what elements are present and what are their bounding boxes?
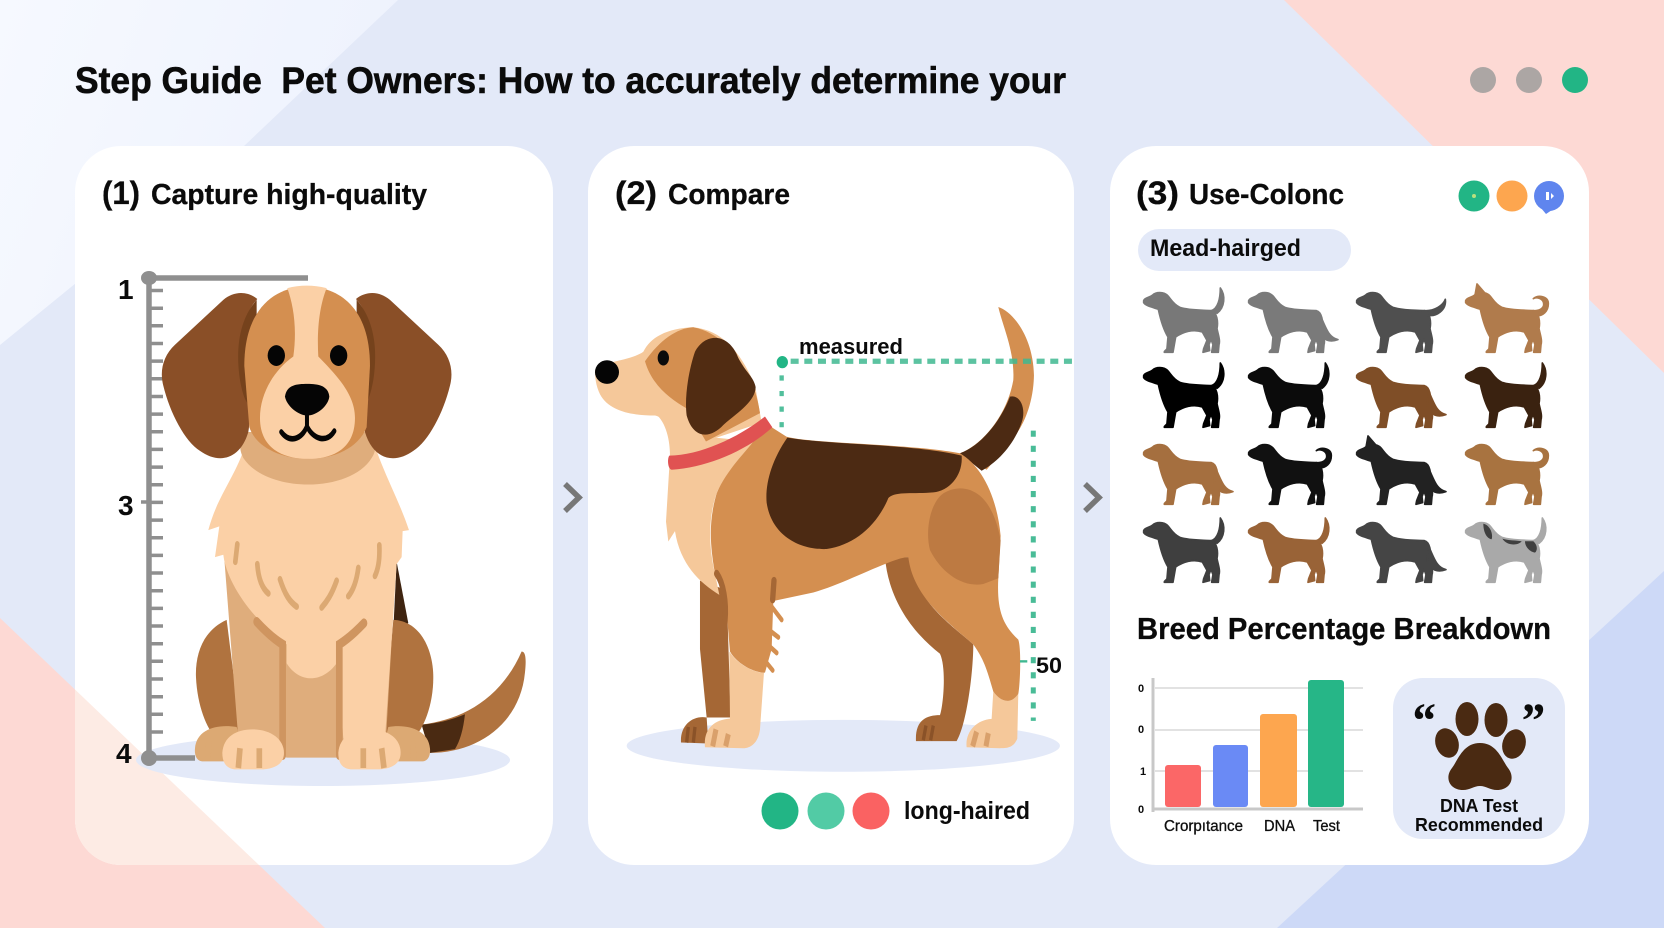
panel 2 heading: Compare [668, 179, 790, 211]
bar chart: 0 [1138, 724, 1144, 736]
bar chart: DNA [1264, 818, 1296, 835]
quote marks: “ [1410, 692, 1435, 748]
panel 3 colour dots [1458, 180, 1564, 214]
header status dots [1470, 67, 1588, 93]
panel 2 heading [615, 175, 790, 211]
height ruler: 1 [118, 274, 134, 305]
panel 3 heading [1136, 175, 1344, 211]
panel 2 heading: (2) [615, 175, 657, 211]
subheading: breed percentage breakdown: Breed Percentage Breakdown [1137, 611, 1551, 646]
height ruler: 4 [116, 738, 132, 769]
icon: standing dog [595, 307, 1060, 772]
legend: long-haired [762, 792, 1030, 830]
bar chart: 1 [1140, 766, 1146, 778]
quote marks: ” [1519, 692, 1544, 748]
icon: sitting dog [162, 286, 526, 769]
bar chart: 0 [1138, 804, 1144, 816]
height ruler [116, 271, 308, 769]
panel 1 heading: Capture high-quality [151, 179, 427, 211]
callout text: DNA Test [1440, 795, 1518, 816]
legend: long-haired: long-haired [904, 797, 1030, 825]
icon: paw print [1431, 702, 1530, 790]
callout text: Recommended [1415, 814, 1543, 835]
panel 1 heading: (1) [102, 175, 140, 211]
label: 50: 50 [1036, 653, 1062, 678]
title: Step Guide Pet Owners: How to accurately determine your [75, 60, 1066, 101]
panel 3 heading: Use-Colonc [1189, 179, 1344, 211]
dog silhouette grid [1144, 284, 1548, 582]
panel: capture high-quality [75, 146, 553, 865]
panel 3 heading: (3) [1136, 175, 1179, 211]
panel: compare [588, 146, 1074, 865]
callout text [1415, 795, 1543, 835]
pill label [1138, 229, 1351, 271]
label: measured: measured [799, 334, 903, 359]
arrow: step 1 to step 2 [565, 484, 579, 511]
measurement guides [777, 356, 1074, 721]
bar chart: Test [1313, 818, 1341, 835]
bar chart [1138, 678, 1363, 835]
height ruler: 3 [118, 490, 134, 521]
callout: DNA test recommended [1393, 678, 1565, 839]
bar chart: Crorpıtance [1164, 818, 1243, 835]
bar chart: 0 [1138, 683, 1144, 695]
dog shadow [136, 734, 510, 786]
quote marks [1410, 692, 1544, 748]
arrow: step 2 to step 3 [1085, 484, 1099, 511]
panel: use color [1110, 146, 1589, 865]
pill label: Mead-hairged [1150, 235, 1301, 262]
